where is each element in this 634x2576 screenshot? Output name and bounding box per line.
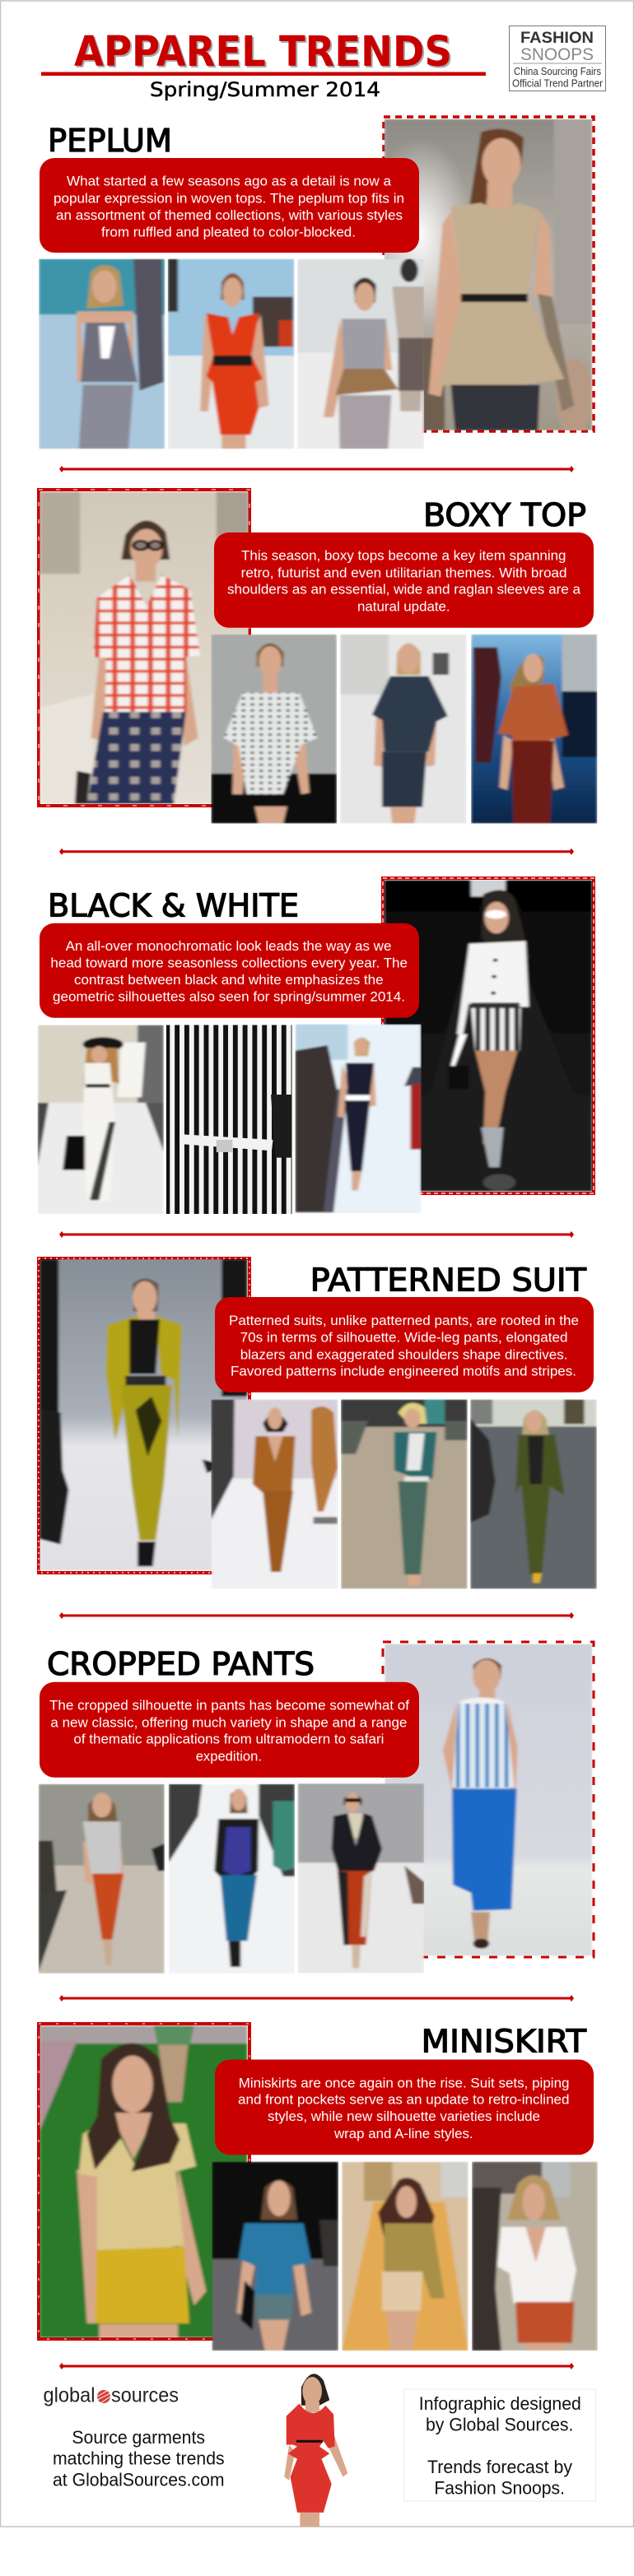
photo frame: cropped pants — [383, 1642, 594, 1957]
heading: peplum: PEPLUM — [48, 123, 172, 159]
text panel: black and white: geometric silhouettes also seen for spring/summer 2014. — [53, 989, 405, 1005]
photo: navy boxy set — [340, 634, 466, 824]
text panel: boxy top: This season, boxy tops become a key item spanning — [241, 548, 566, 564]
photos: black and white row — [38, 1024, 422, 1214]
text panel: cropped pants: a new classic, offering much variety in shape and a range — [50, 1714, 407, 1730]
photo: mustard jacket — [342, 2161, 469, 2350]
text panel: cropped pants — [40, 1682, 419, 1778]
heading: black and white: BLACK & WHITE — [48, 887, 299, 923]
text panel: black and white: head toward more seasonless collections every year. The — [50, 956, 408, 971]
title: APPAREL TRENDS — [74, 28, 452, 77]
text panel: black and white: contrast between black and white emphasizes the — [74, 972, 384, 988]
text panel: patterned suit: 70s in terms of silhouette. Wide-leg pants, elongated — [240, 1330, 568, 1346]
photo frame: boxy top — [39, 490, 249, 806]
photo: teal sequin suit — [341, 1399, 468, 1589]
header — [41, 26, 606, 101]
section: black and white — [38, 878, 594, 1214]
text panel: black and white: An all-over monochromatic look leads the way as we — [66, 938, 391, 954]
logo: Fashion Snoops: Official Trend Partner — [512, 77, 604, 89]
text panel: black and white — [40, 923, 419, 1018]
photo frame: patterned suit — [39, 1258, 249, 1573]
photo: printed peplum — [39, 258, 165, 449]
subtitle: Spring/Summer 2014 — [150, 78, 380, 101]
text: source garments — [53, 2427, 225, 2490]
heading: miniskirt: MINISKIRT — [422, 2023, 587, 2059]
logo: Global Sources: global — [43, 2383, 96, 2406]
credit box: Infographic designed — [419, 2393, 581, 2414]
text panel: miniskirt: Miniskirts are once again on the rise. Suit sets, piping — [239, 2075, 570, 2090]
divider — [59, 1995, 574, 2002]
section: boxy top — [39, 490, 597, 824]
credit box — [403, 2389, 596, 2501]
footer — [43, 2374, 596, 2527]
text panel: cropped pants: expedition. — [196, 1748, 262, 1764]
text panel: peplum: from ruffled and pleated to color-blocked. — [101, 224, 356, 239]
logo: Fashion Snoops — [509, 26, 606, 91]
divider — [59, 466, 574, 472]
divider — [59, 1612, 574, 1619]
photo: rust boxy top — [471, 634, 598, 824]
photo: grid boxy top — [211, 634, 338, 824]
photo: cropped pants main look — [385, 1644, 592, 1956]
divider — [59, 2363, 574, 2369]
credit box: Fashion Snoops. — [434, 2477, 565, 2498]
logo: Global Sources — [43, 2383, 179, 2406]
heading: patterned suit: PATTERNED SUIT — [310, 1262, 587, 1298]
text panel: patterned suit: Favored patterns include engineered motifs and stripes. — [231, 1363, 576, 1379]
section: peplum — [39, 117, 594, 449]
section: patterned suit — [39, 1258, 597, 1589]
photo: peplum main look — [368, 119, 592, 435]
text panel: patterned suit: Patterned suits, unlike patterned pants, are rooted in the — [229, 1313, 579, 1328]
logo: Global Sources: sources — [111, 2383, 179, 2406]
title: APPAREL TRENDS — [76, 30, 454, 78]
photo: miniskirt main look — [40, 2025, 248, 2337]
text panel: miniskirt: styles, while new silhouette varieties include — [268, 2109, 540, 2124]
text panel: patterned suit: blazers and exaggerated shoulders shape directives. — [240, 1346, 568, 1362]
divider — [59, 1231, 574, 1238]
credit box: Trends forecast by — [427, 2457, 572, 2477]
section: miniskirt — [39, 2023, 598, 2350]
text panel: miniskirt: and front pockets serve as an update to retro-inclined — [238, 2092, 570, 2108]
text panel: cropped pants: The cropped silhouette in pants has become somewhat of — [49, 1697, 409, 1713]
text panel: boxy top: shoulders as an essential, wide and raglan sleeves are a — [227, 582, 581, 598]
photo frame: black and white — [383, 878, 594, 1193]
text: source garments: at GlobalSources.com — [53, 2469, 225, 2490]
photo: orange peplum dress — [168, 258, 295, 449]
text panel: miniskirt — [215, 2059, 594, 2155]
photo: striped teal pants — [168, 1784, 295, 1974]
logo: Fashion Snoops: FASHION — [520, 30, 594, 47]
photo: navy jumpsuit on runway — [295, 1024, 422, 1213]
text panel: peplum: an assortment of themed collections, with various styles — [56, 207, 403, 223]
text: source garments: matching these trends — [53, 2448, 225, 2469]
section: cropped pants — [39, 1642, 594, 1974]
photos: patterned suit row — [211, 1399, 597, 1589]
photo: orange cropped pants — [38, 1784, 165, 1974]
text panel: boxy top: retro, futurist and even utilitarian themes. With broad — [241, 565, 566, 580]
photo: model in red peplum dress — [284, 2374, 347, 2527]
photo frame: miniskirt — [39, 2024, 249, 2339]
text panel: miniskirt: wrap and A-line styles. — [333, 2126, 473, 2141]
heading: boxy top: BOXY TOP — [423, 497, 586, 533]
photo: blue knit top — [212, 2161, 339, 2350]
photo: white hat look — [38, 1025, 164, 1214]
photos: peplum row — [39, 258, 424, 449]
photos: miniskirt row — [212, 2162, 598, 2350]
photo: red and black trousers — [298, 1783, 425, 1974]
text panel: patterned suit — [215, 1297, 594, 1393]
photo frame: peplum — [384, 117, 594, 431]
logo: Fashion Snoops: SNOOPS — [520, 45, 594, 64]
photo: boxy top main look — [40, 491, 249, 804]
text panel: cropped pants: of thematic applications from ultramodern to safari — [73, 1732, 384, 1747]
credit box: by Global Sources. — [426, 2415, 573, 2434]
logo: Fashion Snoops: China Sourcing Fairs — [514, 65, 601, 77]
text panel: peplum: What started a few seasons ago as a detail is now a — [67, 174, 392, 189]
photos: boxy top row — [211, 635, 597, 824]
text panel: boxy top — [214, 532, 594, 628]
heading: cropped pants: CROPPED PANTS — [47, 1646, 315, 1682]
photo: black and white main look — [385, 880, 592, 1192]
text panel: boxy top: natural update. — [357, 598, 450, 614]
divider — [59, 849, 574, 855]
text panel: peplum: popular expression in woven tops. The peplum top fits in — [54, 190, 404, 206]
title underline — [41, 72, 486, 76]
text panel: peplum — [40, 158, 419, 253]
text: source garments: Source garments — [72, 2427, 205, 2448]
photo: embellished white top — [472, 2161, 598, 2350]
photo: copper suit — [211, 1399, 338, 1588]
photo: brown peplum — [297, 258, 425, 449]
photo: striped shirt with belt — [166, 1025, 292, 1214]
photo: patterned suit main look — [40, 1259, 248, 1571]
photo: olive plaid suit — [470, 1399, 597, 1589]
photos: cropped pants row — [39, 1783, 424, 1974]
